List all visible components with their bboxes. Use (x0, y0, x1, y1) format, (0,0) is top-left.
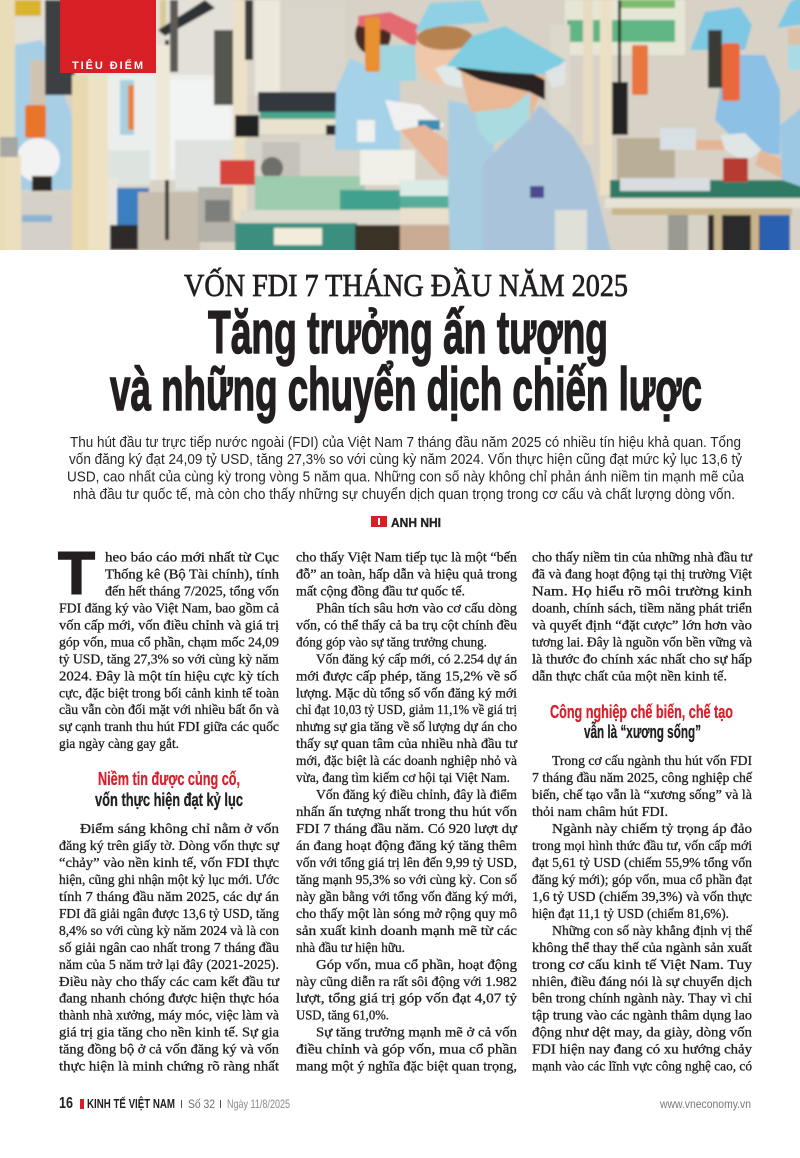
column 3: lower paragraphs: Trong cơ cấu ngành thu hút vốn FDI (552, 754, 752, 769)
column 2: body text: Vốn đăng ký cấp mới, có 2.254 dự án (316, 652, 517, 667)
column 2: body text: mới, đặc biệt là các doanh nghiệp nhỏ và (296, 754, 518, 769)
byline: Anh Nhi (371, 516, 441, 530)
column 2: body text: mang một ý nghĩa đặc biệt quan trọng, (296, 1060, 517, 1075)
column 2: body text: vốn, có thể thấy cả ba trụ cột chính đều (296, 618, 517, 633)
column 3: top paragraph: cho thấy niềm tin của những nhà đầu tư (532, 550, 752, 566)
column 3: lower paragraphs: 7 tháng đầu năm 2025, công nghiệp chế (532, 771, 753, 786)
intro paragraph: Thu hút đầu tư trực tiếp nước ngoài (FDI) của Việt Nam 7 tháng đầu năm 2025 có nhiều tín hiệu khả quan. Tổng (70, 435, 741, 451)
subheading: Công nghiệp chế biến, chế tạo: vẫn là “xương sống” (584, 721, 701, 742)
footer: page number and magazine info: 16 (59, 1095, 73, 1112)
column 1: second paragraph: tăng đồng bộ ở cả vốn đăng ký và vốn (59, 1043, 279, 1058)
column 2: body text: vừa, đang tìm kiếm cơ hội tại Việt Nam. (296, 771, 510, 786)
column 3: lower paragraphs: động như dệt may, da giày, dòng vốn (532, 1026, 752, 1041)
column 3: top paragraph: Nam. Họ hiểu rõ môi trường kinh (532, 584, 752, 599)
column 1: second paragraph: giá trị gia tăng cho nền kinh tế. Sự gia (59, 1026, 280, 1041)
column 1: opening paragraph: gia ngày càng gay gắt. (59, 737, 179, 752)
column 3: top paragraph: dẫn thực chất của một nền kinh tế. (532, 669, 727, 684)
subheading: Niềm tin được củng cố: vốn thực hiện đạt kỷ lục (95, 790, 243, 810)
column 3: lower paragraphs: đăng ký mới); góp vốn, mua cổ phần đạt (532, 873, 752, 888)
column 2: body text: này gần bằng với tổng vốn đăng ký mới, (296, 890, 517, 905)
column 3: lower paragraphs: trong cơ cấu kinh tế Việt Nam. Tuy (532, 958, 752, 973)
column 2: body text: án đang hoạt động đăng ký tăng thêm (296, 839, 517, 854)
column 3: lower paragraphs: không thể thay thế của ngành sản xuất (532, 941, 752, 956)
main headline (110, 299, 702, 423)
column 1: opening paragraph (59, 550, 280, 752)
subheading: Niềm tin được củng cố (95, 769, 243, 810)
column 2: body text (296, 550, 518, 1075)
column 1: opening paragraph: góp vốn, mua cổ phần, chạm mốc 24,09 (59, 635, 279, 650)
column 2: body text: thấy sự quan tâm của nhiều nhà đầu tư (296, 737, 517, 752)
column 3: lower paragraphs: trong mọi hình thức đầu tư, vốn cấp mới (532, 839, 752, 854)
column 1: opening paragraph: FDI đăng ký vào Việt Nam, bao gồm cả (59, 601, 280, 616)
column 2: body text: Vốn đăng ký điều chỉnh, đây là điểm (316, 788, 517, 803)
column 3: lower paragraphs: biến, chế tạo vẫn là “xương sống” và là (532, 788, 753, 803)
column 1: opening paragraph: heo báo cáo mới nhất từ Cục (105, 550, 279, 566)
footer: page number and magazine info: Ngày 11/8/2025 (227, 1097, 290, 1111)
column 3: lower paragraphs: bên trong chính ngành này. Thay vì chỉ (532, 992, 752, 1007)
column 1: opening paragraph: 2024. Đây là một tín hiệu cực kỳ tích (59, 669, 279, 684)
column 1: opening paragraph: tỷ USD, tăng 27,3% so với cùng kỳ năm (59, 652, 279, 667)
column 2: body text: Sự tăng trưởng mạnh mẽ ở cả vốn (316, 1026, 517, 1041)
column 1: second paragraph: thành nhà xưởng, máy móc, việc làm và (59, 1009, 280, 1024)
intro paragraph: nhà đầu tư quốc tế, mà còn cho thấy những sự chuyển dịch quan trọng trong cơ cấu và chất lượng dòng vốn. (73, 487, 735, 503)
column 1: opening paragraph: sự cạnh tranh thu hút FDI giữa các quốc (59, 720, 279, 735)
footer: page number and magazine info (59, 1095, 290, 1112)
subheading: Công nghiệp chế biến, chế tạo (550, 702, 733, 742)
footer: page number and magazine info: Số 32 (188, 1097, 215, 1111)
column 2: body text: mất cộng đồng đầu tư quốc tế. (296, 584, 465, 599)
column 3: lower paragraphs: Ngành này chiếm tỷ trọng áp đảo (552, 822, 752, 837)
column 2: body text: đóng góp vào sự tăng trưởng chung. (296, 635, 487, 650)
column 2: body text: Góp vốn, mua cổ phần, hoạt động (316, 958, 517, 973)
column 1: second paragraph (59, 822, 280, 1075)
column 2: body text: Phân tích sâu hơn vào cơ cấu dòng (316, 601, 517, 616)
column 3: top paragraph: tương lai. Đây là nguồn vốn bền vững và (532, 635, 753, 650)
byline: Anh Nhi: ANH NHI (391, 516, 441, 530)
column 2: body text: lượt, tổng giá trị góp vốn đạt 4,07 tỷ (296, 992, 517, 1007)
column 3: lower paragraphs: FDI hiện nay đang có xu hướng chảy (532, 1043, 752, 1058)
column 3: lower paragraphs (532, 754, 753, 1075)
footer: page number and magazine info: KINH TẾ VIỆT NAM (87, 1096, 175, 1111)
column 3: top paragraph (532, 550, 753, 684)
footer: website: www.vneconomy.vn (659, 1097, 751, 1111)
column 1: second paragraph: hiện, cũng ghi nhận một kỷ lục mới. Ước (59, 873, 279, 888)
kicker title: VỐN FDI 7 THÁNG ĐẦU NĂM 2025 (184, 267, 628, 303)
column 2: body text: FDI 7 tháng đầu năm. Có 920 lượt dự (296, 822, 517, 837)
column 2: body text: vốn với tổng giá trị lên đến 9,99 tỷ USD, (296, 856, 517, 871)
column 3: top paragraph: đã và đang hoạt động tại thị trường Việt (532, 568, 752, 582)
column 3: lower paragraphs: hiện đạt 11,1 tỷ USD (chiếm 81,6%). (532, 907, 729, 922)
intro paragraph: USD, cao nhất của cùng kỳ trong vòng 5 năm qua. Những con số này không chỉ phản ánh niềm tin mạnh mẽ của (67, 470, 745, 486)
column 2: body text: USD, tăng 61,0%. (296, 1009, 389, 1024)
column 1: second paragraph: thực hiện là minh chứng rõ ràng nhất (59, 1060, 279, 1075)
column 2: body text: này cũng diễn ra rất sôi động với 1.982 (296, 975, 517, 990)
column 2: body text: nhưng sự gia tăng về số lượng dự án cho (296, 720, 517, 735)
column 3: lower paragraphs: 1,6 tỷ USD (chiếm 39,3%) và vốn thực (532, 890, 752, 905)
intro paragraph: vốn đăng ký đạt 24,09 tỷ USD, tăng 27,3% so với cùng kỳ năm 2024. Vốn thực hiện cũng đạt mức kỷ lục 13,6 tỷ (69, 452, 743, 468)
column 1: second paragraph: 8,4% so với cùng kỳ năm 2024 và là con (59, 924, 279, 939)
column 1: opening paragraph: Thống kê (Bộ Tài chính), tính (105, 568, 279, 582)
column 1: second paragraph: “chảy” vào nền kinh tế, vốn FDI thực (59, 856, 279, 871)
column 2: body text: sản xuất kinh doanh mạnh mẽ từ các (296, 924, 517, 939)
column 2: body text: nhà đầu tư hiện hữu. (296, 941, 405, 956)
column 2: body text: chỉ đạt 10,03 tỷ USD, giảm 11,1% về giá trị (296, 703, 517, 718)
column 2: body text: đỗ” an toàn, hấp dẫn và hiệu quả trong (296, 568, 517, 582)
column 3: top paragraph: và quyết định “đặt cược” lớn hơn vào (532, 618, 752, 633)
column 3: lower paragraphs: nhiên, điều đáng nói là sự chuyển dịch (532, 975, 752, 990)
column 1: second paragraph: Điều này cho thấy các cam kết đầu tư (59, 975, 279, 990)
subheading: Niềm tin được củng cố: Niềm tin được củng cố, (98, 769, 240, 789)
column 3: lower paragraphs: thỏi nam châm hút FDI. (532, 805, 668, 820)
section tag: Tiêu điểm: TIÊU ĐIỂM (72, 59, 143, 72)
column 2: body text: cho thấy Việt Nam tiếp tục là một “bến (296, 550, 517, 566)
column 1: second paragraph: đăng ký trên giấy tờ. Dòng vốn thực sự (59, 839, 279, 854)
column 2: body text: tăng mạnh 95,3% so với cùng kỳ. Con số (296, 873, 517, 888)
column 3: lower paragraphs: mạnh vào các lĩnh vực công nghệ cao, có (532, 1060, 752, 1075)
column 2: body text: điều chỉnh và góp vốn, mua cổ phần (296, 1043, 517, 1058)
section tag: Tiêu điểm (60, 0, 156, 73)
intro paragraph (67, 435, 745, 503)
column 1: opening paragraph: đến hết tháng 7/2025, tổng vốn (105, 584, 279, 599)
column 1: opening paragraph: vốn cấp mới, vốn điều chỉnh và giá trị (59, 618, 279, 633)
column 2: body text: lượng. Mặc dù tổng số vốn đăng ký mới (296, 686, 517, 701)
column 2: body text: mới được cấp phép, tăng 15,2% về số (296, 669, 517, 684)
photo: factory workers on assembly line (0, 0, 800, 255)
column 1: second paragraph: đang nhanh chóng được hiện thực hóa (59, 992, 280, 1007)
drop cap T: T (58, 540, 95, 607)
column 2: body text: nhấn ấn tượng nhất trong thu hút vốn (296, 805, 517, 820)
column 1: opening paragraph: cực, đặc biệt trong bối cảnh kinh tế toàn (59, 686, 279, 701)
column 1: opening paragraph: cầu vẫn còn đối mặt với nhiều bất ổn và (59, 703, 280, 718)
column 3: top paragraph: là thước đo chính xác nhất cho sự hấp (532, 652, 752, 667)
column 3: lower paragraphs: tập trung vào các ngành thâm dụng lao (532, 1009, 752, 1024)
column 3: lower paragraphs: Những con số này khẳng định vị thế (552, 924, 753, 939)
column 1: second paragraph: FDI đã giải ngân được 13,6 tỷ USD, tăng (59, 907, 279, 922)
column 1: second paragraph: số giải ngân cao nhất trong 7 tháng đầu (59, 941, 279, 956)
column 2: body text: cho thấy một làn sóng mở rộng quy mô (296, 907, 517, 922)
column 1: second paragraph: năm của 5 năm trở lại đây (2021-2025). (59, 958, 279, 973)
column 3: lower paragraphs: đạt 5,61 tỷ USD (chiếm 55,9% tổng vốn (532, 856, 752, 871)
column 3: top paragraph: doanh, chính sách, tiềm năng phát triển (532, 601, 752, 616)
column 1: second paragraph: tính 7 tháng đầu năm 2025, các dự án (59, 890, 279, 905)
column 1: second paragraph: Điểm sáng không chỉ nằm ở vốn (80, 822, 279, 837)
